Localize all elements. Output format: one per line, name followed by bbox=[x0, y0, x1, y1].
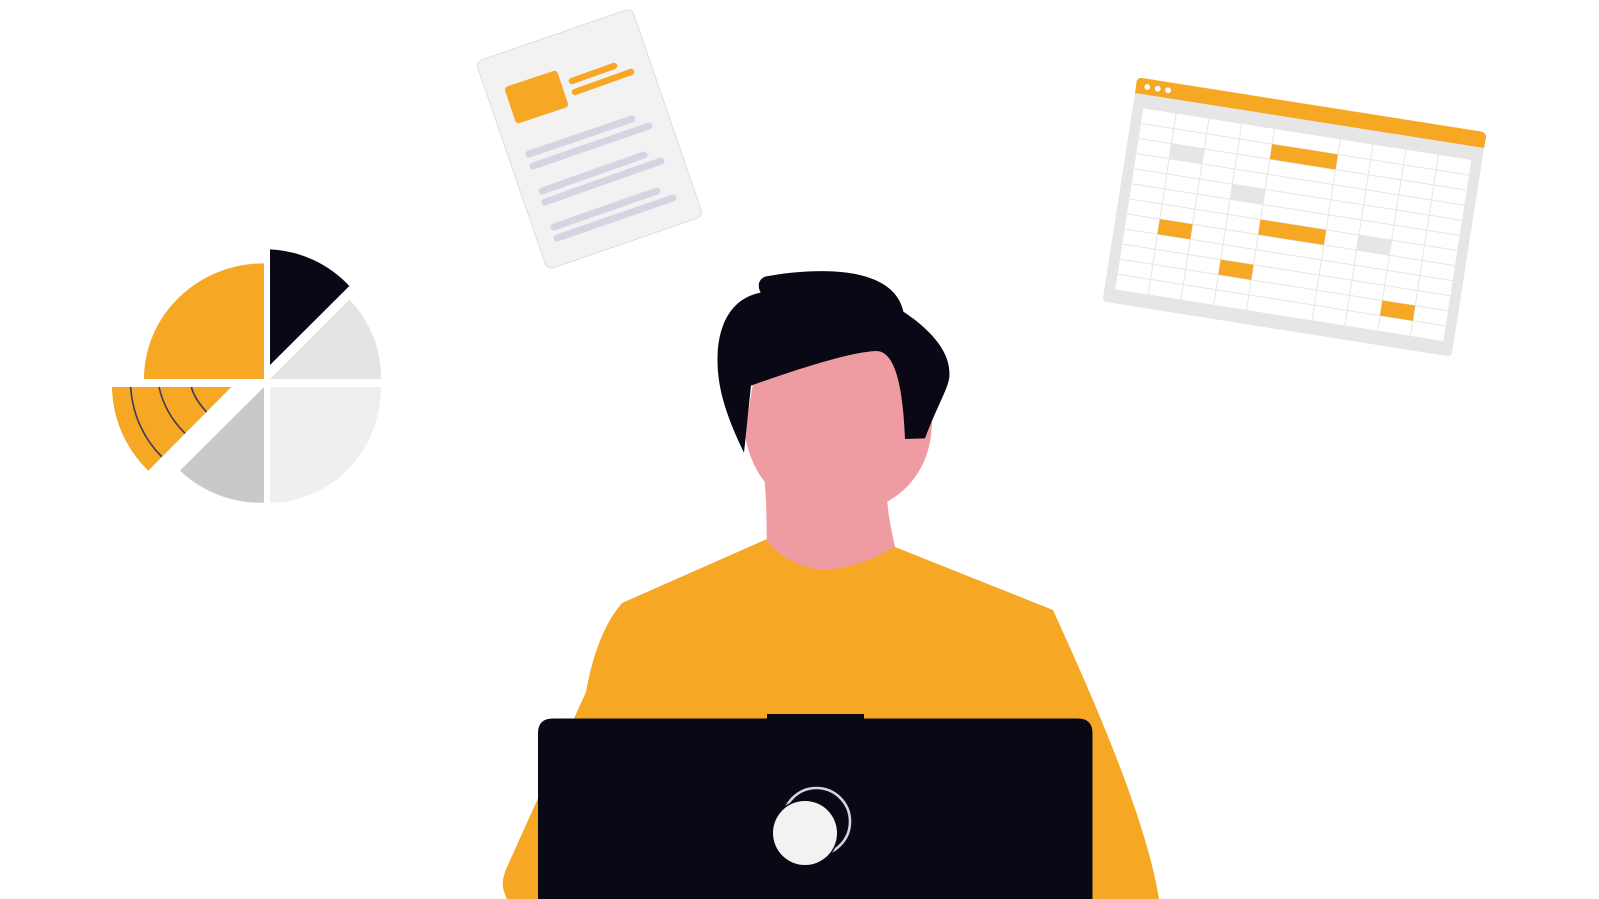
pie slice: mid grey bottom bbox=[180, 387, 264, 503]
pie slice: orange top left bbox=[144, 263, 264, 379]
spreadsheet grid bbox=[1115, 108, 1471, 341]
pie slice: orange exploded with arcs bbox=[112, 387, 231, 471]
laptop logo bbox=[772, 788, 850, 866]
laptop bbox=[538, 714, 1092, 899]
shirt bbox=[503, 539, 1159, 899]
window dots bbox=[1144, 84, 1171, 93]
document page bbox=[476, 8, 703, 270]
spreadsheet window bbox=[1103, 78, 1486, 356]
document image block bbox=[504, 70, 569, 124]
pie slice: light grey right bbox=[270, 300, 381, 379]
pie slice: pale grey bottom right bbox=[270, 387, 381, 503]
page sheet bbox=[476, 8, 703, 270]
window title bar bbox=[1135, 78, 1486, 148]
pie chart bbox=[112, 249, 381, 503]
document body lines bbox=[529, 119, 673, 238]
hair bbox=[717, 271, 949, 453]
head and neck bbox=[745, 343, 932, 570]
person bbox=[503, 271, 1159, 899]
pie slice: black bbox=[270, 249, 349, 365]
window frame bbox=[1103, 93, 1484, 356]
document heading lines bbox=[572, 66, 631, 92]
laptop body bbox=[538, 714, 1092, 899]
